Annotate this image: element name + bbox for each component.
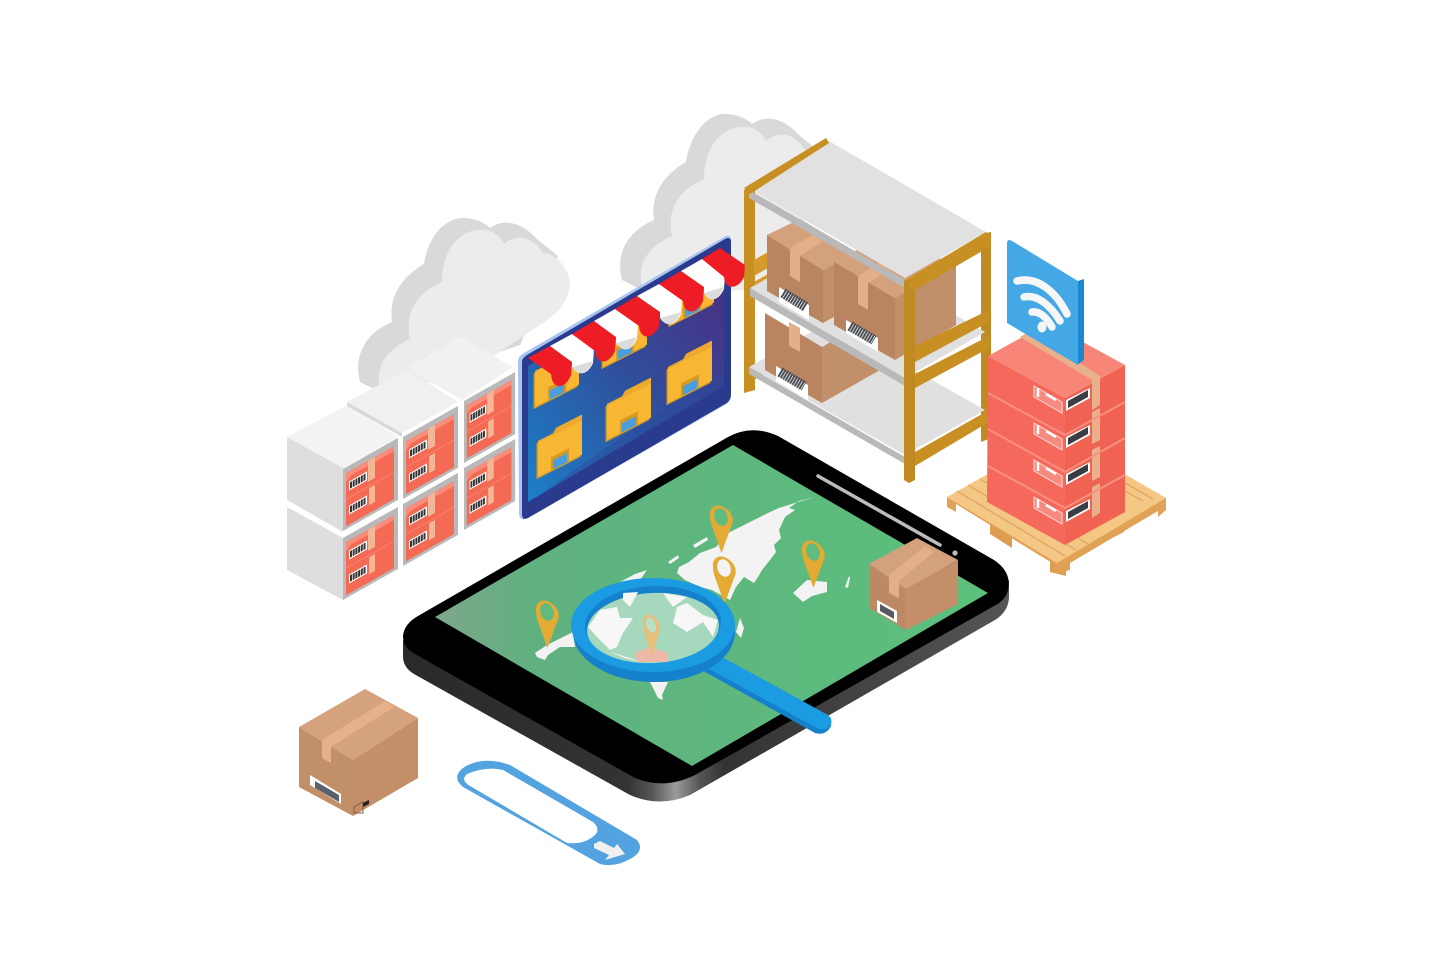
location pin: west (536, 600, 559, 648)
cardboard box: loose on ground (299, 689, 418, 816)
side cross bars (754, 252, 768, 380)
middle shelf (750, 243, 985, 386)
back left post (744, 186, 755, 393)
smartphone tablet (403, 430, 1009, 802)
panel screen (528, 248, 724, 502)
shelving unit (744, 138, 991, 483)
slider button (457, 761, 640, 865)
lens (585, 590, 721, 666)
striped awning (528, 248, 745, 386)
parcel separators (988, 393, 1125, 508)
bottom shelf (749, 322, 985, 464)
icon: slider arrow (594, 841, 625, 860)
front cross bars (909, 232, 991, 466)
camera (952, 550, 958, 556)
cubby column 1 (287, 405, 398, 600)
icon: wifi tile (1007, 240, 1084, 365)
store panel (518, 236, 745, 519)
front right post (904, 278, 915, 483)
handle (698, 654, 831, 734)
location pin: north (710, 505, 733, 553)
Americas north (535, 632, 575, 660)
slider track (457, 761, 640, 865)
stacked red parcels (987, 323, 1125, 545)
cloud: left (358, 218, 570, 395)
cardboard box: on tablet (869, 538, 958, 630)
back right post (981, 232, 991, 442)
Greenland (620, 570, 647, 582)
folder: row 1 (534, 345, 579, 409)
cubby column 3 (407, 337, 513, 400)
cardboard box: shelf lower (765, 313, 880, 403)
cardboard box: shelf upper left (767, 219, 856, 323)
Asia and Europe (677, 497, 815, 600)
location pin: east (802, 540, 825, 588)
folder: row 2 (536, 415, 582, 479)
lens pin (643, 614, 660, 657)
island specks (668, 537, 850, 638)
tablet screen (435, 445, 988, 766)
stack top face (988, 323, 1125, 398)
tablet body (403, 430, 1009, 783)
parcel labels (1034, 386, 1090, 524)
ring top (571, 578, 735, 672)
cloud: right (620, 114, 832, 292)
speaker (818, 476, 940, 545)
ring inner wall (583, 582, 723, 666)
location pin: center (713, 556, 736, 604)
cardboard box: shelf upper right (834, 244, 956, 360)
magnifying glass (571, 578, 832, 734)
pallet (947, 435, 1166, 576)
lens parcel (635, 647, 668, 662)
cubby fronts: upper and lower (403, 372, 515, 566)
storage cubbies (287, 337, 515, 600)
South America (650, 682, 668, 700)
cubby column 2 (347, 370, 458, 437)
stack left face (987, 356, 1065, 545)
lens map land (588, 592, 718, 662)
slider window (464, 769, 597, 843)
Australia (793, 580, 827, 602)
pallet feet (990, 520, 1124, 576)
stack right face (1065, 365, 1125, 545)
panel frame (518, 236, 731, 519)
world map (535, 497, 850, 700)
pallet top slats (947, 435, 1166, 563)
parcel tape (1020, 331, 1100, 410)
top shelf (744, 138, 986, 288)
tablet side (403, 580, 1009, 802)
ring side (573, 582, 735, 682)
